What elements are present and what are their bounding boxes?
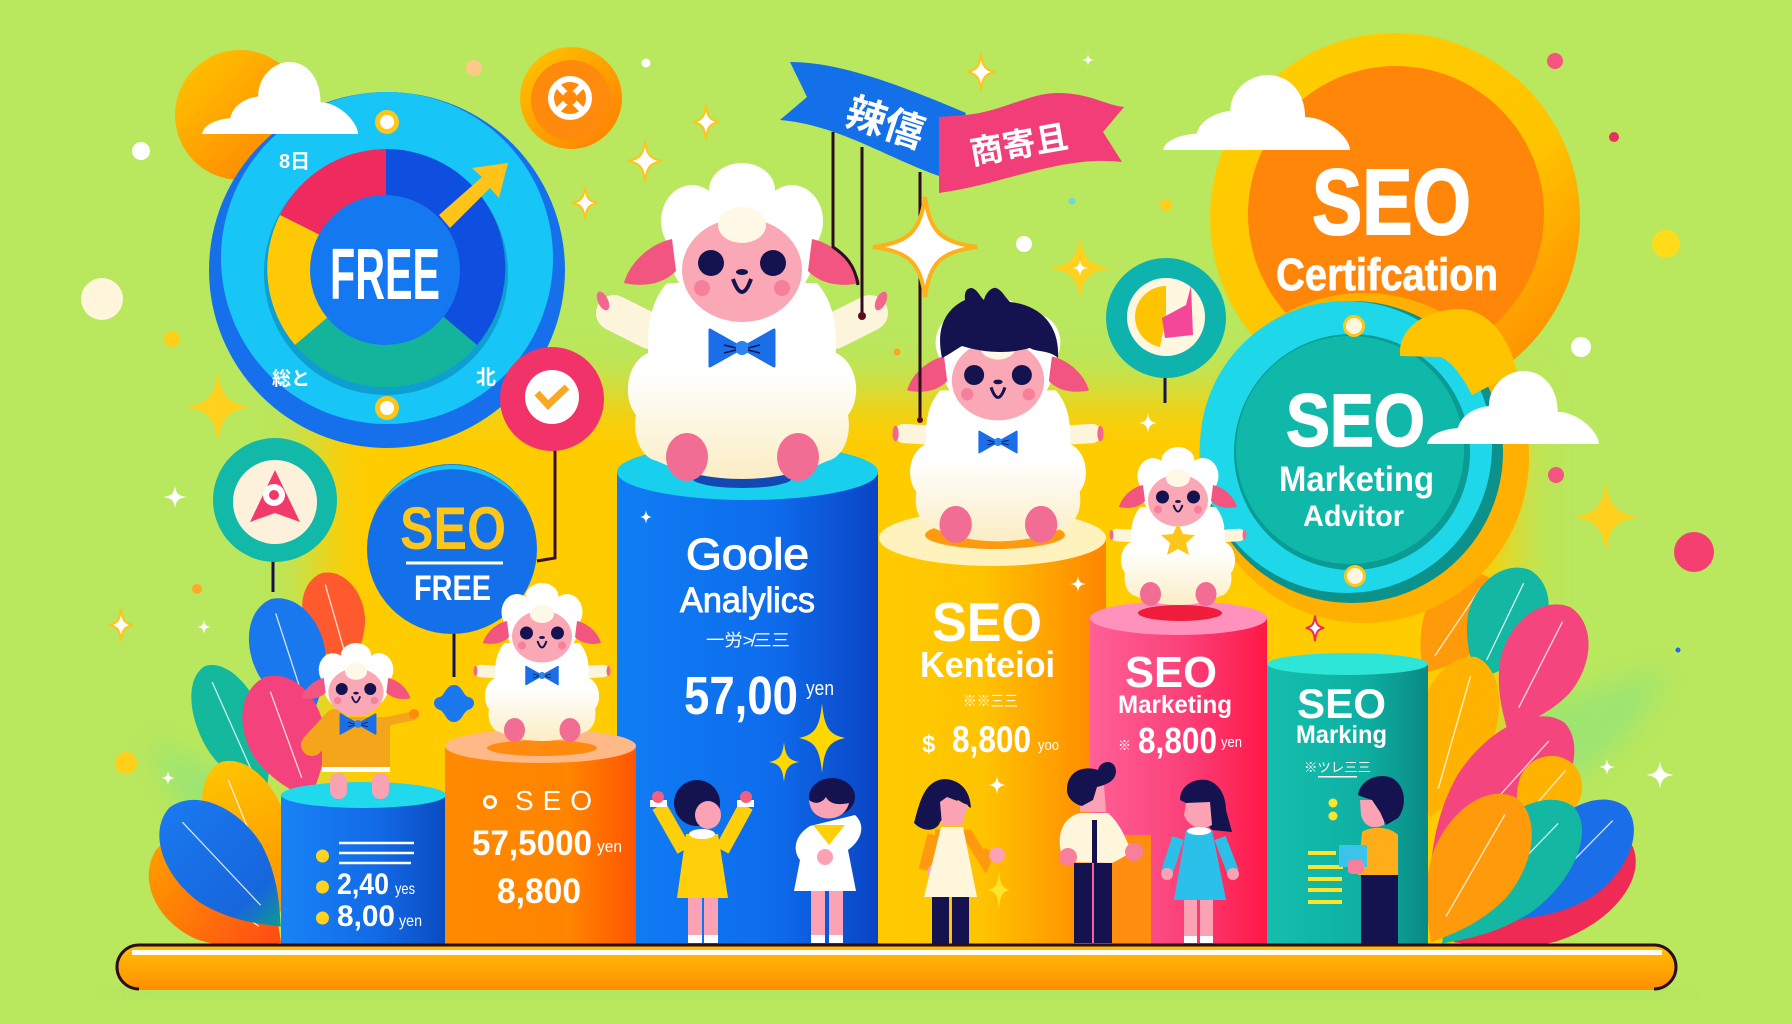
heading: SEO bbox=[515, 785, 592, 816]
flag poles bbox=[833, 132, 920, 420]
column: teal bbox=[1267, 653, 1428, 945]
text: Certification: Certifcation bbox=[1276, 249, 1498, 300]
panel: SEO marketing advisor circle bbox=[1199, 293, 1599, 623]
price: ※ bbox=[1118, 738, 1131, 753]
list marks bbox=[1308, 776, 1357, 904]
price: 2,40 bbox=[337, 868, 389, 901]
panel: FREE wheel bbox=[175, 50, 565, 448]
wheel pins bbox=[375, 110, 399, 420]
price bbox=[922, 719, 1059, 760]
heading: Goole bbox=[686, 530, 809, 579]
list lines bbox=[339, 843, 414, 863]
person: girl in blue bbox=[1161, 780, 1239, 943]
heading: Marketing bbox=[1118, 691, 1232, 719]
icon: blue flower bbox=[434, 685, 474, 722]
icon: check badge with pole bbox=[500, 347, 604, 561]
mascot: large sheep bbox=[594, 163, 890, 481]
right leaves bbox=[1392, 553, 1665, 986]
text: SEO: SEO bbox=[1286, 379, 1425, 462]
price: yen bbox=[1221, 734, 1242, 751]
banner: blue flag: 辣僖 bbox=[840, 90, 930, 157]
center badge: FREE bbox=[330, 235, 440, 315]
center badge bbox=[310, 195, 460, 345]
mascot: medium sheep with hair bbox=[893, 288, 1103, 543]
cloud bbox=[1163, 75, 1350, 150]
text: FREE: FREE bbox=[414, 569, 491, 608]
icon: orange coin behind wheel bbox=[175, 50, 305, 180]
heading: ※※三三 bbox=[963, 693, 1018, 710]
prices: 57,5000 bbox=[472, 824, 592, 863]
mascot: sheep on orange column bbox=[474, 583, 610, 742]
person: man with tie bbox=[1059, 762, 1143, 943]
icon: arrow bbox=[439, 163, 508, 228]
mascot: small sheep with star bbox=[1110, 447, 1246, 606]
bullets bbox=[316, 850, 329, 924]
cloud bbox=[1427, 371, 1599, 444]
heading: SEO bbox=[1297, 680, 1386, 727]
price bbox=[337, 868, 422, 933]
icon: large sparkle bbox=[873, 197, 977, 297]
person: girl in white and orange bbox=[914, 779, 1005, 945]
price: yoo bbox=[1038, 737, 1059, 754]
left leaves bbox=[126, 565, 379, 983]
person: boy with tablet bbox=[1339, 776, 1404, 945]
ring pins bbox=[1343, 315, 1366, 587]
wheel labels: 北 bbox=[476, 366, 496, 389]
price: yen bbox=[806, 678, 834, 700]
heading: Kenteioi bbox=[920, 644, 1055, 685]
column: blue tall bbox=[617, 444, 878, 945]
sparkles bbox=[109, 54, 1674, 789]
pie chart bbox=[267, 149, 505, 387]
heading: Marking bbox=[1296, 721, 1387, 749]
price: $ bbox=[922, 731, 936, 758]
pole end dots bbox=[858, 312, 923, 423]
prices bbox=[472, 824, 622, 911]
price: yen bbox=[399, 913, 422, 930]
heading: SEO bbox=[932, 591, 1042, 653]
heading: 一労≯三三 bbox=[706, 631, 790, 650]
text: Advitor: Advitor bbox=[1303, 500, 1404, 533]
mascot: sheep in yellow shirt bbox=[302, 643, 419, 799]
banner: blue flag bbox=[780, 62, 966, 178]
badge: SEO FREE bbox=[367, 464, 537, 677]
panel: SEO certification circle bbox=[1163, 33, 1580, 403]
wheel rings bbox=[209, 92, 565, 448]
wheel labels: 8日 bbox=[279, 151, 310, 173]
heading bbox=[1296, 680, 1387, 775]
price: 57,00 bbox=[684, 666, 798, 726]
icon: rocket badge bbox=[213, 438, 337, 592]
heading: ※ツレ三三 bbox=[1304, 760, 1371, 775]
wheel labels: 総と bbox=[272, 368, 310, 390]
yellow backdrop glow bbox=[116, 395, 1677, 1024]
base platform bar bbox=[117, 945, 1676, 990]
price: 8,800 bbox=[952, 719, 1031, 760]
icon: orange target coin bbox=[520, 47, 622, 149]
heading: SEO bbox=[1125, 648, 1217, 697]
column: blue small bbox=[281, 782, 446, 945]
icon: pie badge bbox=[1106, 258, 1226, 403]
heading bbox=[680, 530, 815, 650]
person: child in white bbox=[794, 778, 861, 943]
text: SEO: SEO bbox=[400, 495, 506, 562]
column: orange bbox=[445, 729, 636, 945]
prices: yen bbox=[597, 837, 622, 856]
banner: pink flag bbox=[939, 93, 1124, 193]
decorative dots bbox=[81, 53, 1714, 774]
heading bbox=[920, 591, 1055, 710]
price: 8,00 bbox=[337, 900, 395, 933]
text: Marketing: Marketing bbox=[1279, 460, 1434, 499]
wheel labels bbox=[272, 151, 496, 390]
banner: pink flag: 商寄且 bbox=[967, 118, 1071, 171]
sparkles bbox=[769, 703, 845, 782]
price: yes bbox=[395, 881, 415, 898]
text: SEO: SEO bbox=[1312, 150, 1471, 254]
cloud top left bbox=[202, 62, 358, 134]
person: child in yellow bbox=[650, 780, 754, 943]
heading: Analylics bbox=[680, 581, 815, 620]
yellow hook bbox=[1400, 309, 1517, 395]
price: 8,800 bbox=[1138, 720, 1217, 761]
column: yellow bbox=[879, 510, 1106, 945]
prices: 8,800 bbox=[497, 872, 581, 911]
heading bbox=[1118, 648, 1232, 719]
column: pink bbox=[1090, 601, 1267, 945]
